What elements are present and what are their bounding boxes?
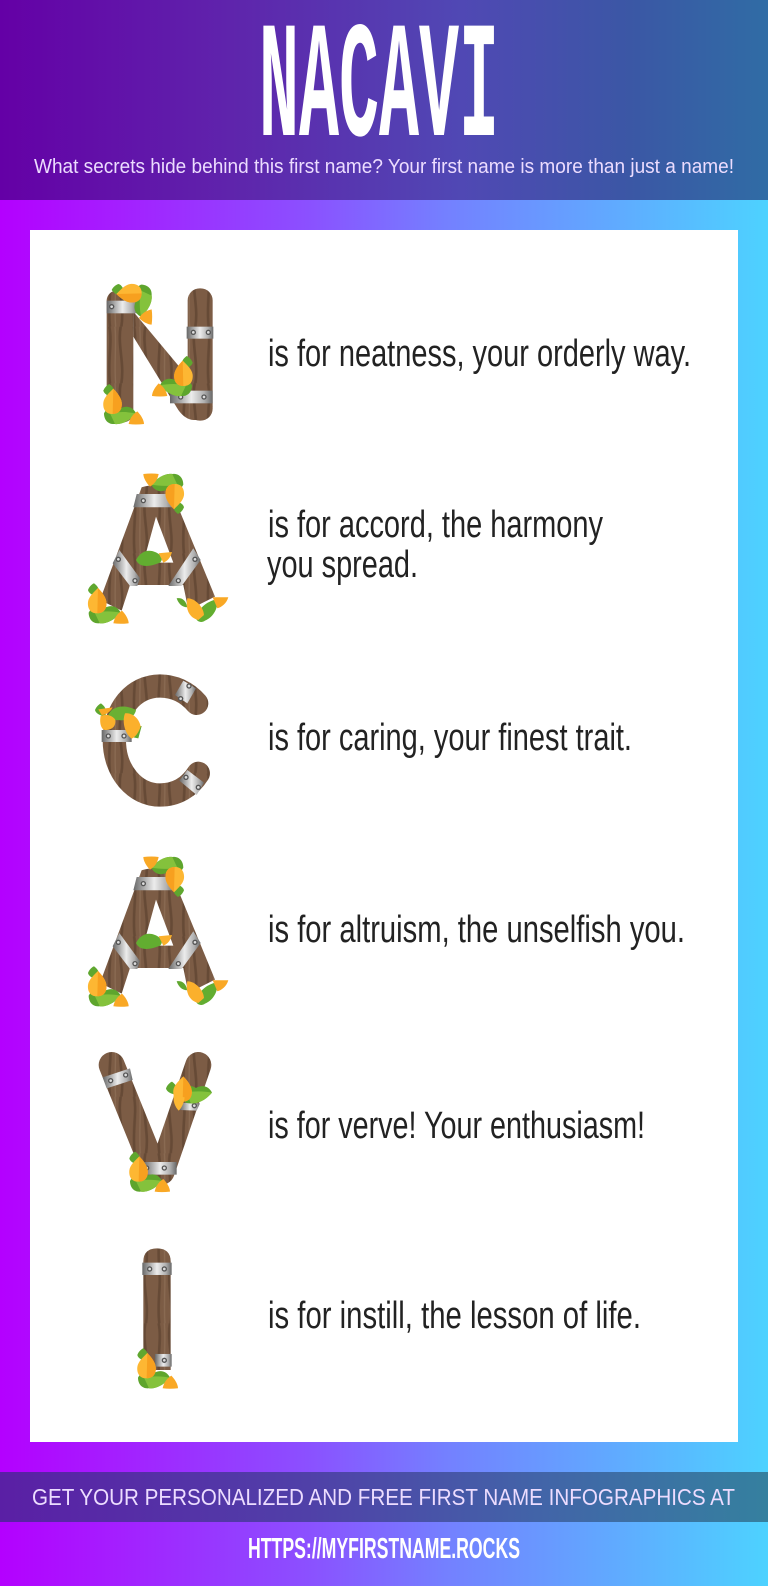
decorative leaves on C	[95, 703, 142, 739]
icon: wooden letter V	[103, 1065, 212, 1192]
icon: wooden letter A	[88, 473, 228, 624]
row: A	[88, 473, 603, 624]
row: A second	[88, 856, 685, 1007]
icon: wooden letter C	[95, 681, 204, 795]
text: I line: is for instill, the lesson of life.	[268, 1295, 641, 1337]
icon: wooden letter N	[103, 284, 213, 424]
white content panel	[30, 230, 738, 1442]
text: A lines: is for accord, the harmony	[268, 504, 603, 546]
decorative leaves on V	[166, 1076, 212, 1111]
icon: wooden letter I	[137, 1248, 178, 1389]
row: V	[103, 1065, 645, 1192]
footer url: HTTPS://MYFIRSTNAME.ROCKS	[248, 1533, 520, 1565]
text: V line: is for verve! Your enthusiasm!	[268, 1105, 645, 1147]
text: A lines	[267, 504, 603, 586]
footer band	[0, 1472, 768, 1522]
text: A lines: you spread.	[267, 544, 418, 586]
row: I	[137, 1248, 641, 1389]
header band	[0, 0, 768, 200]
row: C	[95, 681, 632, 795]
icon: wooden letter A second	[88, 856, 228, 1007]
text: C line: is for caring, your finest trait.	[268, 717, 632, 759]
subtitle: What secrets hide behind this first name? Your first name is more than just a name!	[34, 156, 734, 178]
row: N	[103, 284, 691, 424]
